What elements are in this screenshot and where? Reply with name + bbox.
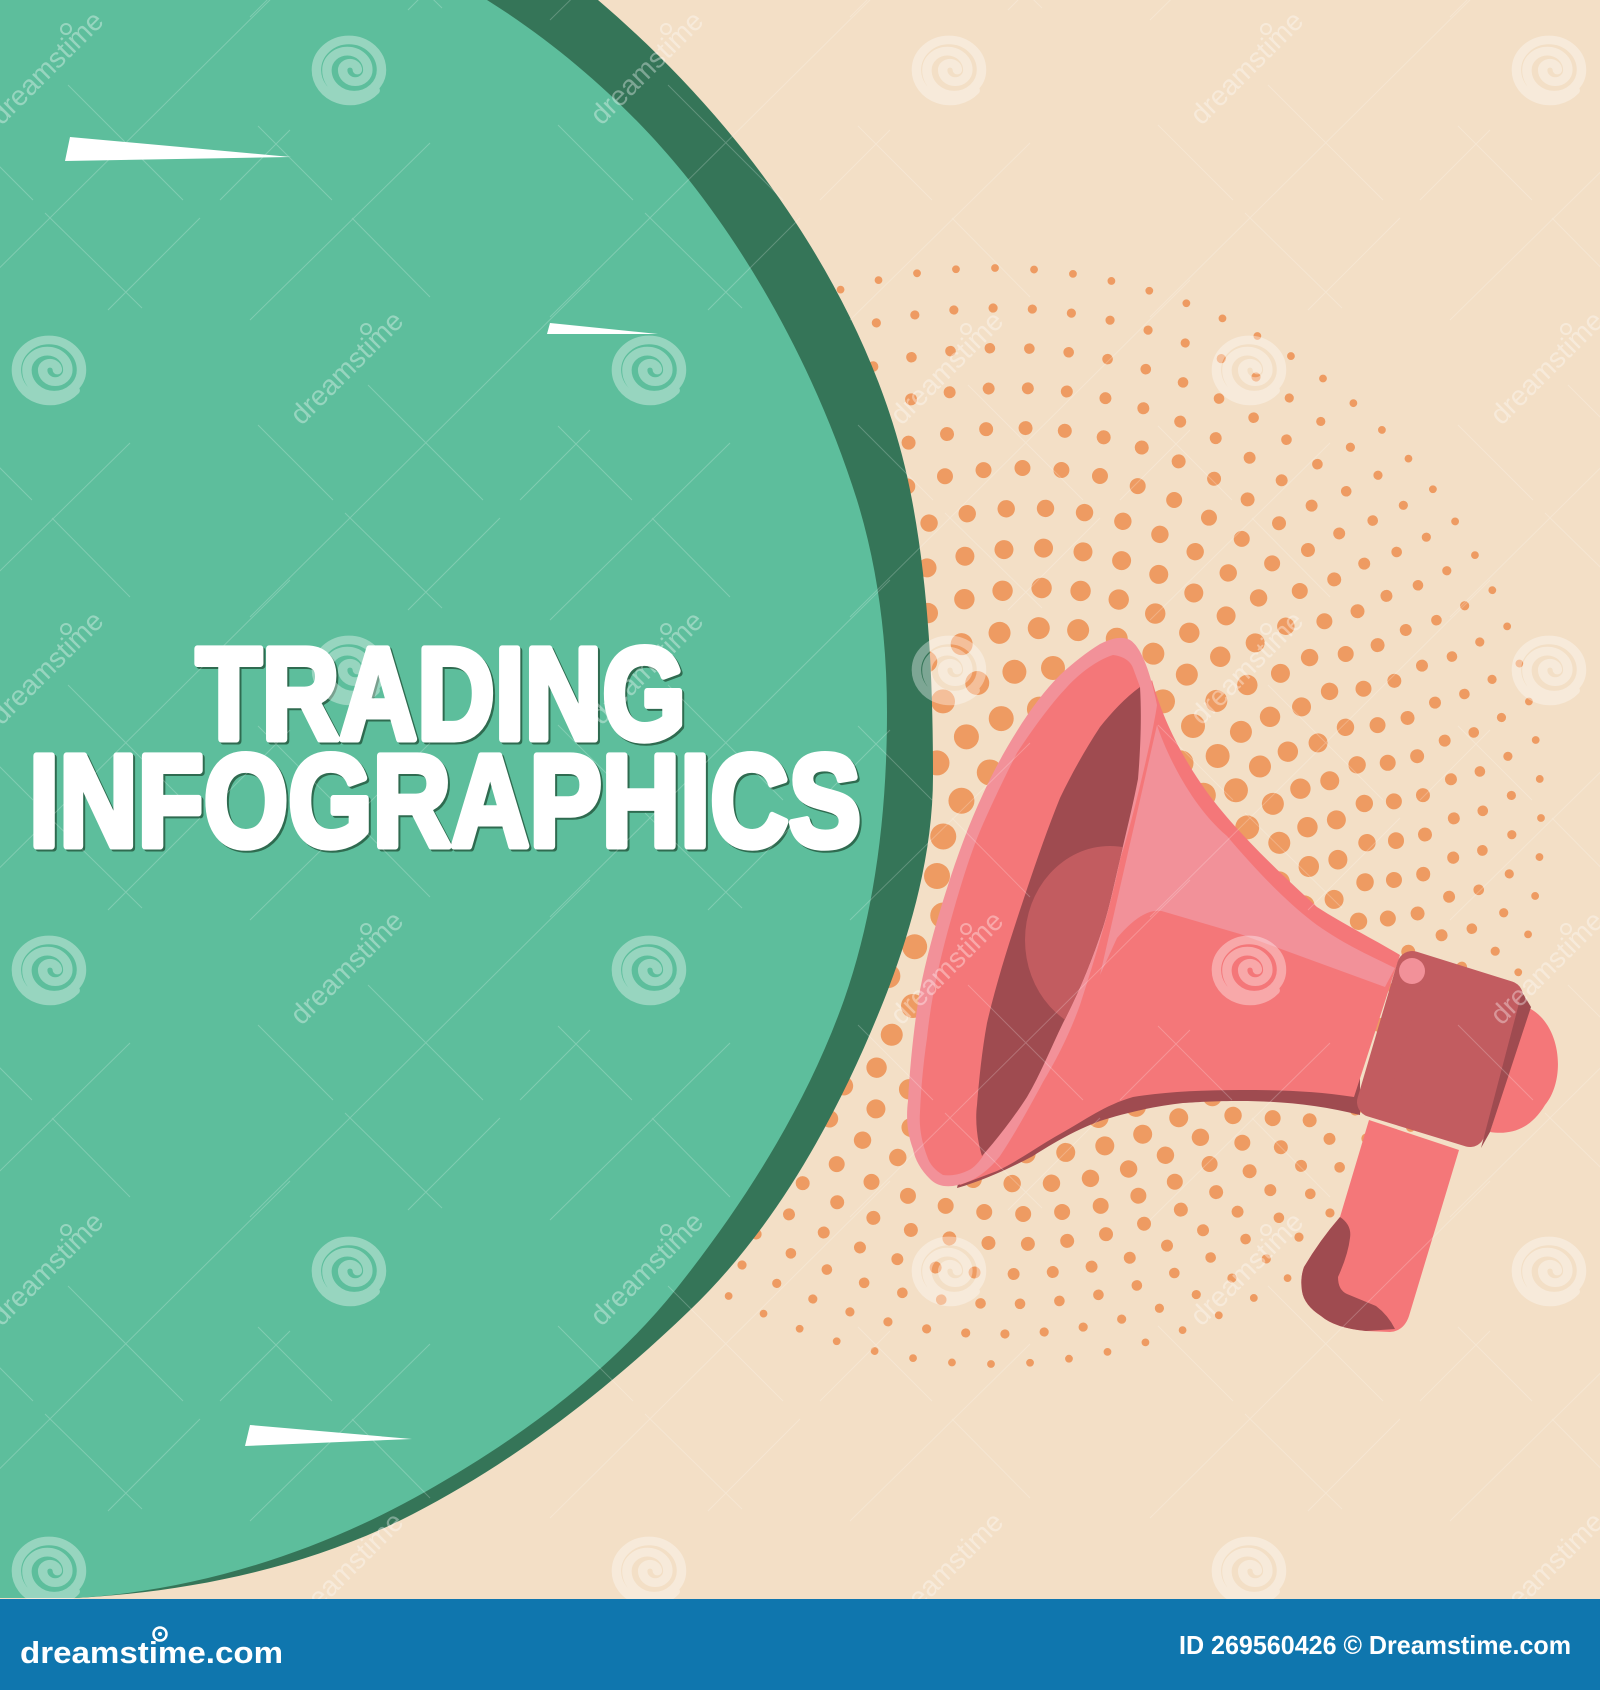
- bubble face: [0, 0, 887, 1598]
- megaphone handle: [1301, 1120, 1459, 1332]
- icon: megaphone: [907, 638, 1558, 1332]
- horn highlight: [1100, 725, 1395, 987]
- footer image id: ID 269560426 © Dreamstime.com: [1179, 1630, 1571, 1660]
- watermark overlay: dreamstime: [284, 1506, 409, 1631]
- watermark overlay: dreamstime: [1184, 5, 1309, 130]
- watermark overlay: dreamstime: [584, 605, 709, 730]
- collar edge shadow: [1481, 992, 1531, 1148]
- bubble highlight top: [65, 137, 291, 161]
- horn body: [960, 680, 1400, 1185]
- collar: [1372, 966, 1508, 1132]
- halftone dots: [443, 266, 1543, 1366]
- watermark overlay: dreamstime: [284, 905, 409, 1030]
- watermark overlay: dreamstime: [1184, 605, 1309, 730]
- watermark overlay: dreamstime: [584, 1206, 709, 1331]
- title: [29, 620, 863, 876]
- watermark overlay: dreamstime: [884, 1506, 1009, 1631]
- footer logo: dreamstime.com: [20, 1635, 283, 1670]
- watermark overlay: dreamstime: [584, 5, 709, 130]
- bubble highlight bottom: [245, 1425, 412, 1446]
- watermark overlay: dreamstime: [1184, 1206, 1309, 1331]
- title shadow: TRADING: [198, 622, 688, 769]
- bell inner wall: [920, 655, 1140, 1175]
- watermark overlay: dreamstime: [884, 305, 1009, 430]
- horn lower shadow: [957, 1000, 1360, 1188]
- title shadow: [31, 622, 863, 876]
- watermark overlay: dreamstime: [884, 905, 1009, 1030]
- watermark overlay: dreamstime: [284, 305, 409, 430]
- speech bubble: [0, 0, 933, 1598]
- bubble highlight middle: [547, 323, 658, 334]
- handle grip: [1301, 1217, 1395, 1331]
- collar rivet: [1399, 958, 1425, 984]
- bell cone: [1025, 846, 1123, 1020]
- bell interior: [976, 687, 1141, 1156]
- title text: INFOGRAPHICS: [29, 727, 861, 874]
- title text: [29, 620, 861, 874]
- bubble shadow rim: [0, 0, 933, 1598]
- footer bar: [0, 1599, 1600, 1690]
- title text: TRADING: [196, 620, 686, 767]
- bell rim: [907, 638, 1157, 1186]
- title shadow: INFOGRAPHICS: [31, 729, 863, 876]
- speaker back cap: [1490, 1008, 1558, 1133]
